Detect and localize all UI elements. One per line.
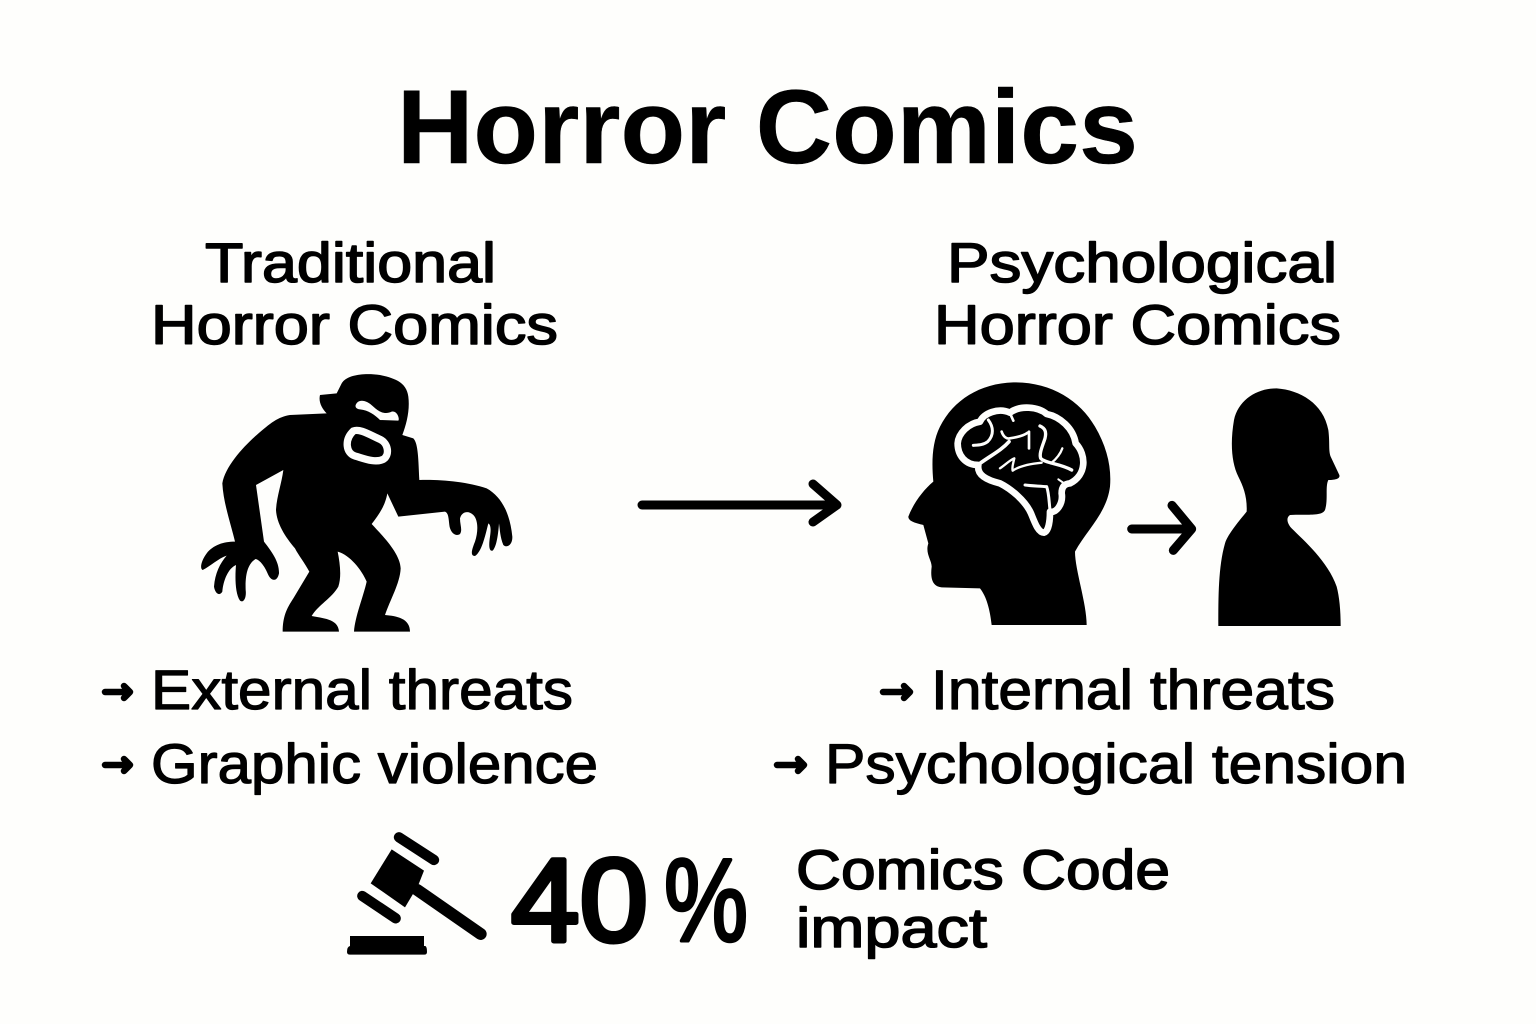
list: psychological traits: Internal threats	[931, 659, 1335, 721]
title: Horror Comics	[397, 69, 1138, 186]
label: comics code impact: impact	[796, 897, 988, 959]
list: psychological traits	[777, 659, 1407, 795]
label: comics code impact: Comics Code	[796, 839, 1170, 901]
heading: traditional: Horror Comics	[151, 294, 558, 356]
arrow: small	[1132, 505, 1192, 550]
icon: monster silhouette	[201, 374, 512, 632]
heading: traditional: Traditional	[205, 232, 496, 294]
list: traditional traits: External threats	[151, 659, 573, 721]
list: psychological traits: Psychological tension	[825, 733, 1407, 795]
arrow: traditional to psychological	[642, 484, 837, 522]
icon: brain	[958, 408, 1083, 533]
icon: head	[908, 382, 1110, 625]
icon: silhouette	[1218, 388, 1341, 626]
icon: gavel	[347, 837, 481, 955]
heading: psychological	[934, 232, 1341, 356]
icon: head with brain, arrow and silhouette	[908, 382, 1341, 626]
panel: traditional horror comics	[105, 232, 598, 795]
callout: comics code impact	[347, 835, 1170, 967]
stat: 40%: %	[664, 835, 748, 967]
heading: traditional	[151, 232, 558, 356]
heading: psychological: Psychological	[947, 232, 1337, 294]
list: traditional traits: Graphic violence	[151, 733, 598, 795]
heading: psychological: Horror Comics	[934, 294, 1341, 356]
stat: 40%	[511, 835, 748, 967]
list: traditional traits	[105, 659, 598, 795]
stat: 40%: 40	[511, 835, 648, 967]
label: comics code impact	[796, 839, 1170, 959]
panel: psychological horror comics	[777, 232, 1407, 795]
